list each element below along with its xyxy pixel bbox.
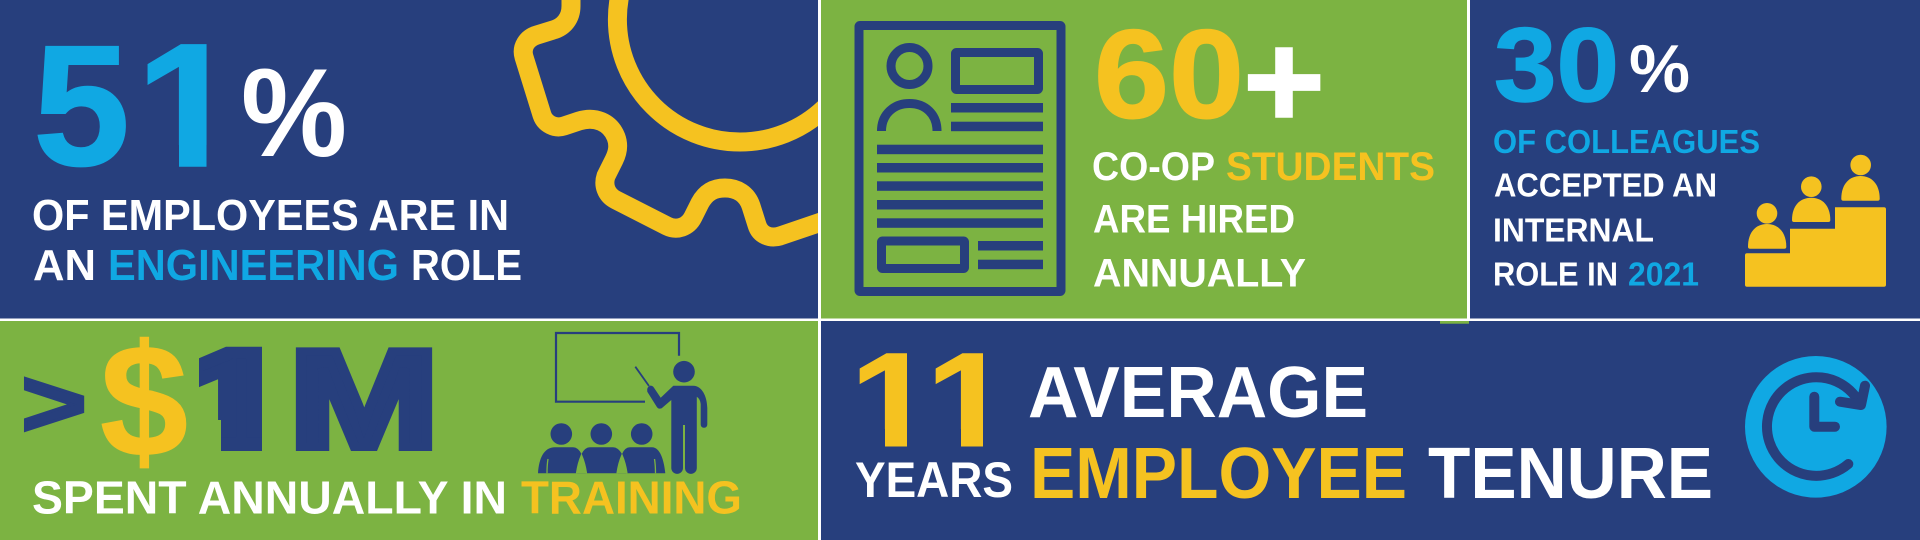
stat: more than 1M dollars: 1 <box>180 325 293 474</box>
panel: training spend <box>0 311 818 540</box>
icon: clock with return arrow <box>1745 356 1887 498</box>
stat: 11 years <box>856 353 1012 498</box>
stat: 11 years: YEARS <box>855 452 1013 508</box>
text: engineering role caption: ROLE <box>411 242 522 290</box>
panel: employee tenure <box>821 321 1920 540</box>
text: internal role caption <box>1493 124 1760 294</box>
text: engineering role caption: AN <box>33 242 96 290</box>
stat: more than 1M dollars: $ <box>100 311 188 490</box>
text: engineering role caption: OF EMPLOYEES ARE IN <box>32 192 509 240</box>
stat: 51 percent <box>38 44 344 168</box>
stat: 51 percent: % <box>241 44 347 183</box>
text: co-op caption: CO-OP <box>1092 145 1215 189</box>
icon: gear outline <box>523 0 863 237</box>
stat: more than 1M dollars <box>24 336 432 468</box>
stat: 11 years: 1 <box>850 326 935 475</box>
text: training caption <box>32 472 742 524</box>
text: engineering role caption <box>32 192 522 290</box>
stat: 30 percent: % <box>1629 31 1690 107</box>
text: average employee tenure <box>1028 353 1713 514</box>
text: co-op caption: ARE HIRED <box>1093 198 1295 242</box>
text: co-op caption: STUDENTS <box>1226 145 1435 189</box>
text: training caption: TRAINING <box>521 472 742 524</box>
stat: 60 plus: 60 <box>1094 4 1244 144</box>
text: internal role caption: OF COLLEAGUES <box>1493 124 1760 161</box>
text: internal role caption: 2021 <box>1628 257 1699 294</box>
text: average employee tenure: AVERAGE <box>1028 353 1368 433</box>
panel: internal roles <box>1470 0 1920 318</box>
stat: 60 plus <box>1094 4 1325 156</box>
panel: engineering share <box>0 0 863 319</box>
text: engineering role caption: ENGINEERING <box>108 242 399 290</box>
text: co-op caption <box>1092 145 1435 296</box>
stat: 51 percent: 5 <box>33 10 130 202</box>
text: internal role caption: INTERNAL <box>1493 213 1654 250</box>
text: internal role caption: ROLE IN <box>1493 257 1618 294</box>
stat: 30 percent <box>1494 7 1690 124</box>
text: co-op caption: ANNUALLY <box>1093 252 1306 296</box>
stat: more than 1M dollars: > <box>21 350 87 457</box>
text: average employee tenure: EMPLOYEE <box>1030 434 1407 514</box>
stat: 51 percent: 1 <box>135 8 241 204</box>
stat: 60 plus: + <box>1243 5 1325 156</box>
stat: 11 years: 1 <box>926 326 1011 475</box>
icon: people on steps <box>1745 155 1886 287</box>
icon: resume document <box>859 26 1061 292</box>
stat: more than 1M dollars: M <box>289 322 439 477</box>
icon: presenter with audience <box>538 333 707 474</box>
text: internal role caption: ACCEPTED AN <box>1494 168 1717 205</box>
text: training caption: SPENT ANNUALLY IN <box>32 472 507 524</box>
text: average employee tenure: TENURE <box>1428 434 1713 514</box>
stat: 30 percent: 30 <box>1494 7 1619 124</box>
panel: co-op students <box>821 0 1467 318</box>
